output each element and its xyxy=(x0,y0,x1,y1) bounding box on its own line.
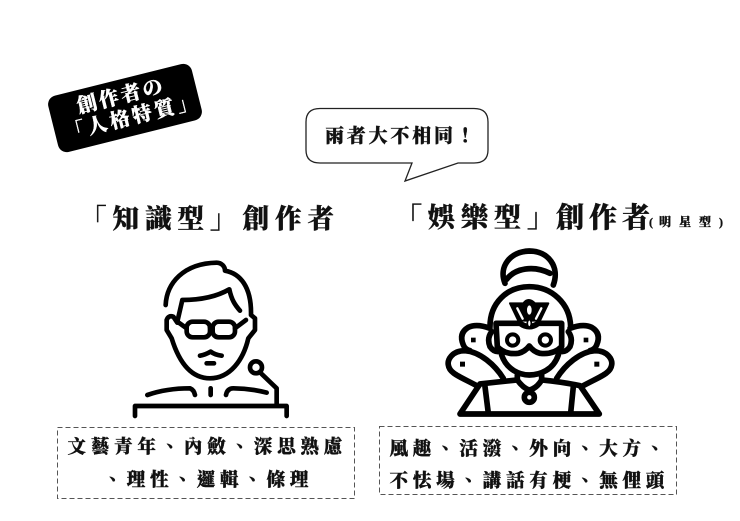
bubble text: 雨者大不相同！ xyxy=(325,126,478,147)
traits line 2: 不怯場、講話有梗、無俚頭 xyxy=(390,472,669,492)
badge: creator traits xyxy=(46,62,204,154)
traits line 2: 、理性、邏輯、條理 xyxy=(104,470,313,490)
trait box: knowledge type xyxy=(57,427,355,499)
heading: knowledge creators: 「知識型」創作者 xyxy=(80,204,340,234)
trait box: entertainment type xyxy=(379,426,677,495)
traits line 1: 文藝青年、內斂、深思熟慮 xyxy=(68,438,347,458)
heading: entertainment creators: 「娛樂型」創作者 xyxy=(395,203,655,234)
badge text line 2: 「人格特質」 xyxy=(63,90,202,145)
heading suffix: star type: (明星型) xyxy=(649,215,731,229)
badge text line 1: 創作者の xyxy=(75,75,167,118)
traits line 1: 風趣、活潑、外向、大方、 xyxy=(390,440,669,460)
